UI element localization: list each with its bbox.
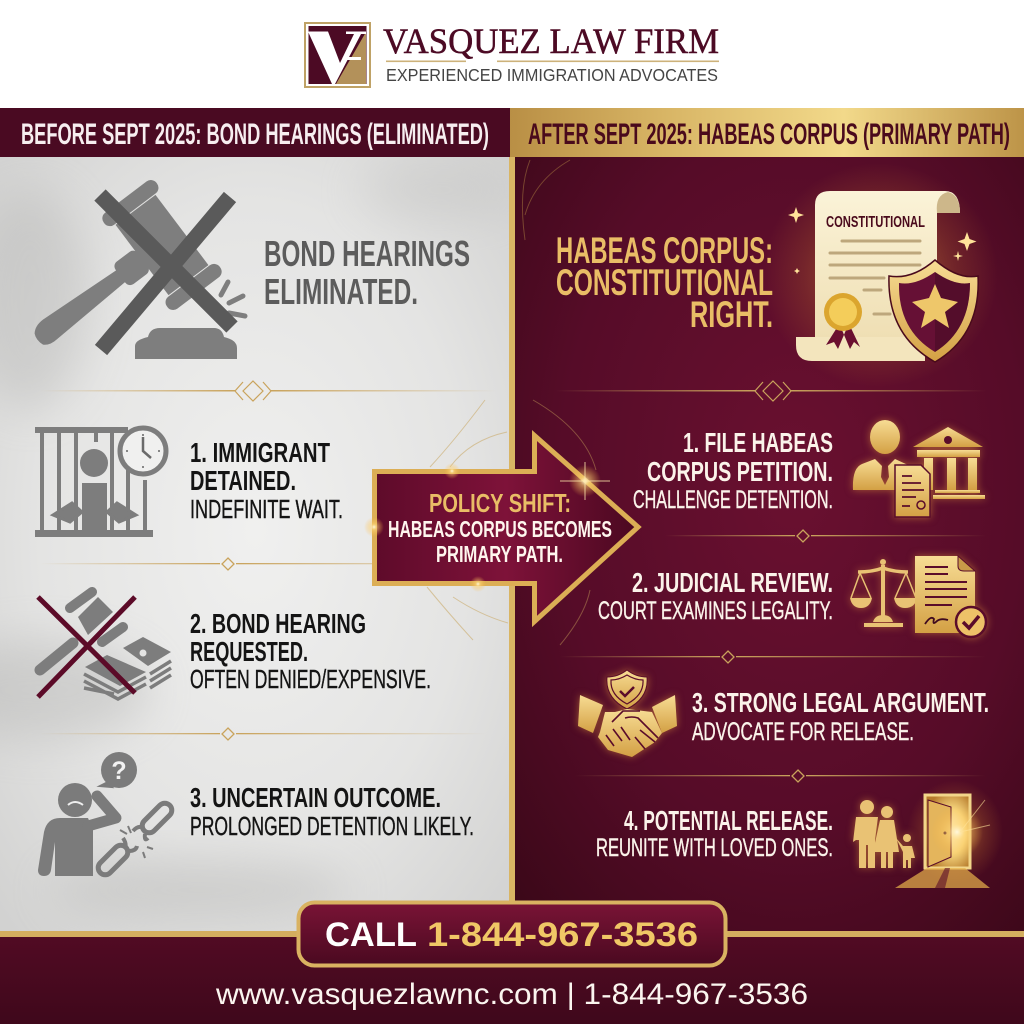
heading: habeas corpus constitutional right: HABEAS CORPUS: [556, 230, 773, 271]
divider right 4 [575, 770, 986, 782]
divider left 2 [40, 558, 486, 570]
banner: before heading [0, 108, 510, 157]
step 2 text right [598, 567, 833, 625]
banner: after heading [510, 108, 1024, 157]
heading: habeas corpus constitutional right: CONSTITUTIONAL [556, 262, 773, 303]
arrow text: PRIMARY PATH. [436, 541, 563, 567]
step 3 text right [692, 687, 989, 746]
step 2 text left: OFTEN DENIED/EXPENSIVE. [190, 664, 431, 694]
step 4 text right: REUNITE WITH LOVED ONES. [596, 834, 833, 862]
step 3 text left: 3. UNCERTAIN OUTCOME. [190, 782, 441, 813]
step 2 text left: REQUESTED. [190, 636, 308, 667]
divider ornament right [555, 381, 986, 401]
panel: after Sept 2025 [509, 157, 1024, 935]
logo: Vasquez Law Firm [305, 21, 719, 87]
arrow text [388, 488, 612, 567]
heading: bond hearings eliminated [264, 233, 470, 312]
icon: handshake with shield [578, 670, 677, 757]
step 3 text left [190, 782, 474, 841]
heading: habeas corpus constitutional right: RIGHT. [690, 294, 773, 335]
step 1 text right: CHALLENGE DETENTION. [633, 486, 833, 514]
decorative gold curves around arrow [427, 400, 508, 640]
icon: uncertain person and broken chain: ? [111, 757, 127, 785]
call button: 1-844-967-3536 [427, 916, 698, 954]
step 1 text right: 1. FILE HABEAS [683, 427, 833, 458]
footer contact line: www.vasquezlawnc.com | 1-844-967-3536 [215, 978, 808, 1011]
heading: bond hearings eliminated: BOND HEARINGS [264, 233, 470, 274]
icon: family and open door [853, 780, 1003, 888]
icon: uncertain person and broken chain [38, 752, 175, 878]
step 2 text right: COURT EXAMINES LEGALITY. [598, 597, 833, 625]
divider ornament left [40, 381, 496, 401]
heading: habeas corpus constitutional right [556, 230, 773, 335]
step 3 text right: ADVOCATE FOR RELEASE. [692, 718, 914, 746]
divider right 3 [560, 651, 986, 663]
tagline: EXPERIENCED IMMIGRATION ADVOCATES [386, 65, 718, 85]
step 1 text right: CORPUS PETITION. [647, 456, 833, 487]
logo mark: VF monogram [305, 23, 370, 87]
icon: lawyer, petition and courthouse [853, 420, 985, 517]
icon: detained person behind bars with clock [35, 427, 166, 537]
step 2 text left: 2. BOND HEARING [190, 608, 366, 639]
call button: CALL [325, 916, 417, 954]
call button [298, 902, 726, 966]
arrow: policy shift [364, 436, 638, 622]
step 1 text left: 1. IMMIGRANT [190, 437, 330, 468]
icon: scales of justice and document [850, 556, 986, 637]
icon: denied gavel and money [38, 592, 171, 699]
step 2 text left [190, 608, 431, 694]
panel: before Sept 2025 [0, 157, 520, 935]
header: white logo band [0, 0, 1024, 108]
arrow text: HABEAS CORPUS BECOMES [388, 516, 612, 542]
step 4 text right: 4. POTENTIAL RELEASE. [624, 805, 833, 836]
step 2 text right: 2. JUDICIAL REVIEW. [632, 567, 833, 598]
divider left 3 [40, 728, 486, 740]
firm name: VASQUEZ LAW FIRM [383, 21, 719, 61]
arrow text: POLICY SHIFT: [429, 488, 571, 518]
heading: bond hearings eliminated: ELIMINATED. [264, 271, 418, 312]
step 1 text left [190, 437, 343, 524]
icon: struck-out gavel [1, 177, 245, 387]
icon: constitutional scroll with seal and shield [762, 163, 998, 387]
step 1 text left: DETAINED. [190, 465, 296, 496]
shield [889, 260, 978, 362]
wax seal [824, 293, 862, 349]
step 4 text right [596, 805, 833, 862]
step 1 text right [633, 427, 833, 514]
footer band [0, 931, 1024, 1024]
step 1 text left: INDEFINITE WAIT. [190, 494, 343, 524]
scroll title: CONSTITUTIONAL [826, 214, 925, 231]
banner: before heading: BEFORE SEPT 2025: BOND HEARINGS (ELIMINATED) [21, 118, 489, 151]
step 3 text left: PROLONGED DETENTION LIKELY. [190, 811, 474, 841]
divider right 2 [665, 530, 986, 542]
money stack [84, 637, 171, 699]
